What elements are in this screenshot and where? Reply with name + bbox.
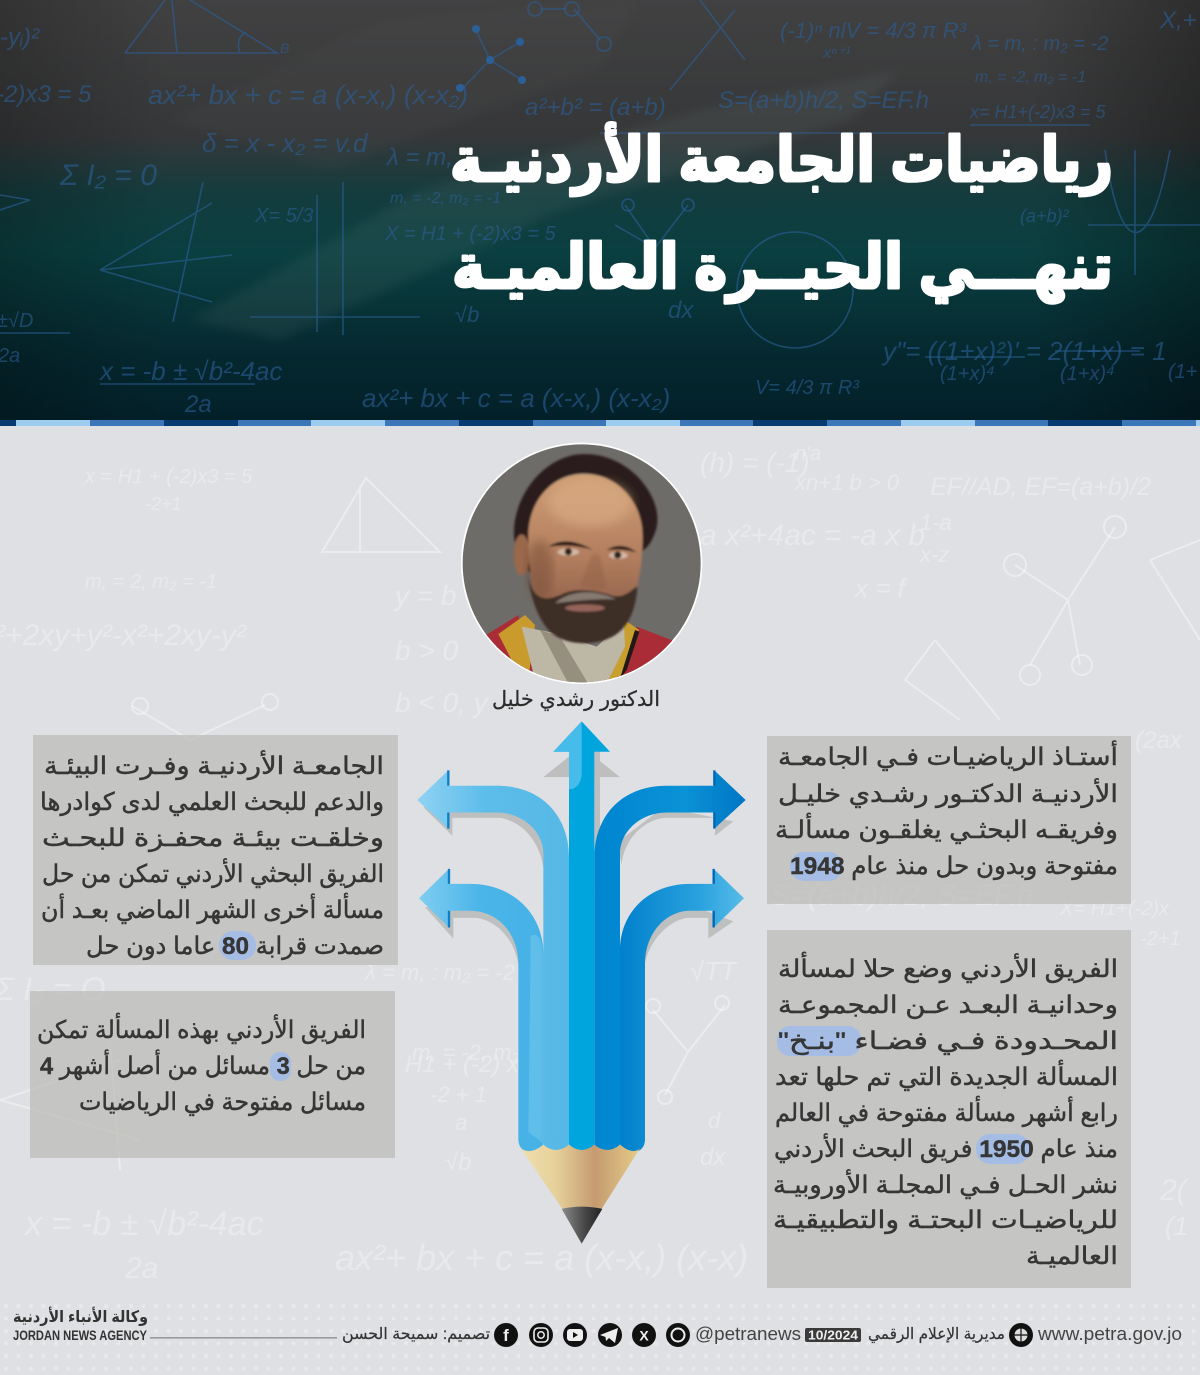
center arrow [553,721,610,1153]
page background with faint math: 1-a [920,510,952,535]
chalkboard diagrams [0,0,1200,384]
right box: research result: وحدانيـة البعـد عـن المجموعـة [778,992,1118,1019]
chalkboard formulas: xⁿ⁺¹ [822,45,851,62]
social icon: telegram [598,1323,622,1347]
right box: research result [767,930,1131,1288]
chalkboard formulas: S=(a+b)h/2, S=EF.h [718,87,929,114]
right box: professor intro: الأردنيـة الدكتـور رشـدي خليـل [778,778,1118,808]
page background with faint math: d [708,1108,721,1133]
title [450,122,1113,303]
page background with faint math: dx [700,1144,726,1171]
chalkboard formulas: (1+x)⁴ [1060,363,1115,385]
page background with faint math: b > 0 [395,635,458,666]
chalkboard formulas: (1+ [1168,361,1197,383]
chalkboard formulas: m, = -2, m₂ = -1 [975,69,1086,86]
highlight: 3 [270,1052,291,1081]
right box: research result: نشر الحـل فـي المجلـة الأوروبيـة [773,1169,1118,1199]
page background with faint math: (1 [1165,1211,1188,1241]
page background with faint math: √b [445,1149,472,1176]
social icon: x: X [639,1328,649,1344]
highlight: 1948 [790,852,843,881]
page background with faint math: S=(a+b)h/2, S=EF.h [770,879,1034,912]
pencil wood [521,1145,640,1209]
chalkboard formulas: V= 4/3 π R³ [755,377,860,399]
page background with faint math: λ = m, : m₂ = -2 [364,960,515,985]
header panel [0,0,1200,420]
social icon: facebook [494,1323,518,1347]
upper left arrow [417,770,569,1153]
chalkboard formulas: X= 5/3 [254,205,313,227]
chalkboard formulas: a²+b² = (a+b) [525,94,666,121]
social handle: @petranews [695,1324,801,1344]
page background with faint math: y = b [393,580,456,611]
page background with faint math: 2a [124,1252,158,1285]
page background with faint math: x-z [919,542,949,567]
chalkboard formulas: X,+ [1159,7,1197,34]
arrow shadows [423,746,733,964]
page background with faint math: EF//AD, EF=(a+b)/2 [930,473,1151,501]
agency logo text: JORDAN NEWS AGENCY [13,1327,148,1343]
chalkboard formulas: ax²+ bx + c = a (x-x,) (x-x₂) [148,80,468,110]
page background with faint math: ax²+ bx + c = a (x-x,) (x-x) [335,1237,748,1278]
chalkboard formulas: x= H1+(-2)x3 = 5 [969,102,1107,122]
left box: university support: وخلقـت بيئـة محفـزة للبحـث [42,825,384,852]
right box: research result: العالميـة [1026,1243,1118,1270]
page background with faint math: x = H1 + (-2)x3 = 5 [84,466,253,488]
chalkboard formulas: √b [455,302,479,327]
chalkboard formulas: λ = m, [385,144,453,171]
highlight: 1950 [976,1134,1030,1164]
page background with faint math: -2+1 [1140,928,1181,950]
icon: globe [1009,1323,1033,1347]
page background with faint math: X= H1+(-2)x [1059,898,1170,920]
right box: research result: المسألة الجديدة التي تم حلها تعد [775,1060,1118,1091]
page background with faint math: a x²+4ac = -a x b [700,519,925,552]
left box: three of four problems: من حل 3 مسائل من أصل أشهر 4 [40,1050,366,1080]
striped divider [0,420,1200,426]
left box: university support [33,735,398,965]
chalkboard formulas: y"= ((1+x)²)' = 2(1+x) = 1 [881,336,1167,366]
chalkboard formulas: (1+x)⁴ [940,363,995,385]
department name: مديرية الإعلام الرقمي [868,1326,1005,1344]
left box: university support: الفريق البحثي الأردني تمكن من حل [42,858,384,888]
lower left arrow [419,869,543,1153]
chalkboard formulas: m, = -2, m₂ = -1 [390,190,501,207]
page background with faint math: n'a [795,443,821,465]
page background with faint math: (2ax [1135,727,1183,754]
page background with faint math: (h) = (-1) [700,447,810,478]
pencil lead [562,1207,602,1244]
agency logo text [13,1307,148,1343]
chalkboard formulas: 2a [184,391,212,418]
page background with faint math: 2( [1159,1174,1190,1207]
right box: professor intro: أستـاذ الرياضيـات فـي الجامعـة [778,741,1118,771]
chalkboard formulas: dx [668,297,694,324]
page background with faint math: √TT [690,956,738,986]
left box: university support: الجامعـة الأردنيـة وفـرت البيئـة [44,750,384,780]
right box: research result: المحـدودة فـي فضـاء "بنـخ" [778,1028,1118,1055]
social icon: youtube [563,1323,587,1347]
right box: professor intro: مفتوحة وبدون حل منذ عام 1948 [790,853,1118,880]
left box: university support: مسألة أخرى الشهر الماضي بعـد أن [41,893,384,924]
social icon: whatsapp [666,1323,690,1347]
left box: three of four problems: الفريق الأردني بهذه المسألة تمكن [37,1013,366,1044]
social icon: x [632,1323,656,1347]
social icon: facebook: f [503,1326,509,1345]
chalkboard formulas: δ = x - x₂ = v.d [202,128,369,158]
page background with faint math: a [455,1110,467,1135]
chalkboard formulas: (-1)ⁿ nlV = 4/3 π R³ [780,18,967,43]
page background with faint math: -2 + 1 [430,1082,487,1107]
page background with faint math: x = -b ± √b²-4ac [23,1205,264,1243]
right box: research result: منذ عام 1950 فريق البحث الأردني [774,1133,1118,1163]
right box: research result: رابع أشهر مسألة مفتوحة في العالم [775,1096,1118,1127]
right box: professor intro [767,736,1131,904]
footer [13,1307,1182,1347]
page background with faint math: xn+1 b > 0 [794,470,900,495]
left box: university support: والدعم للبحث العلمي لدى كوادرها [40,789,384,816]
upper right arrow [594,770,746,1153]
portrait photo [460,443,703,687]
highlight: 80 [219,931,256,960]
highlight: Banach [777,1026,861,1056]
chalkboard formulas: Σ I₂ = 0 [59,159,157,192]
page background with faint math: b < 0, y [395,687,490,718]
page background with faint math: -2+1 [145,494,182,514]
chalkboard formulas: X = H1 + (-2)x3 = 5 [384,223,557,245]
page background with faint math: m, = 2, m₂ = -1 [85,571,217,593]
right box: research result: للرياضيـات البحتـة والتطبيقيـة [773,1207,1118,1234]
left box: university support: صمدت قرابة 80 عاما دون حل [86,933,384,960]
designer credit: تصميم: سميحة الحسن [342,1326,490,1344]
title: رياضيات الجامعة الأردنيـة [450,122,1113,196]
right box: professor intro: وفريقـه البحثـي يغلقـون مسألـة [775,813,1118,844]
page background with faint math: x = f [853,573,908,603]
agency logo text: وكالة الأنباء الأردنية [13,1307,148,1326]
left box: three of four problems: مسائل مفتوحة في الرياضيات [79,1089,366,1116]
pencil with five arrows [417,721,746,1244]
page background with faint math: ²+2xy+y²-x²+2xy-y² [0,619,247,652]
chalkboard formulas: -yᵢ)² [0,24,40,51]
lower right arrow [620,869,744,1153]
chalkboard formulas: λ = m, : m₂ = -2 [971,33,1108,55]
chalkboard diagrams: B [280,40,289,56]
date badge: 10/2024 [808,1328,858,1342]
right box: research result: الفريق الأردني وضع حلا لمسألة [778,952,1118,983]
page background with faint math: H1 + (-2) x [405,1051,520,1078]
website: www.petra.gov.jo [1037,1324,1182,1344]
title: تنهـــي الحيــرة العالميـة [452,233,1113,303]
chalkboard formulas: ax²+ bx + c = a (x-x,) (x-x₂) [362,383,670,413]
chalkboard formulas: (a+b)² [1020,206,1070,226]
doctor name: الدكتور رشدي خليل [492,688,660,711]
chalkboard formulas [0,0,1200,418]
left box: three of four problems [30,991,395,1158]
social icon: instagram [529,1323,553,1347]
chalkboard formulas: x = -b ± √b²-4ac [98,356,282,386]
page background with faint math: m, = -2, m₂ = [412,1040,539,1065]
faint geometry sketches [0,478,1200,1170]
